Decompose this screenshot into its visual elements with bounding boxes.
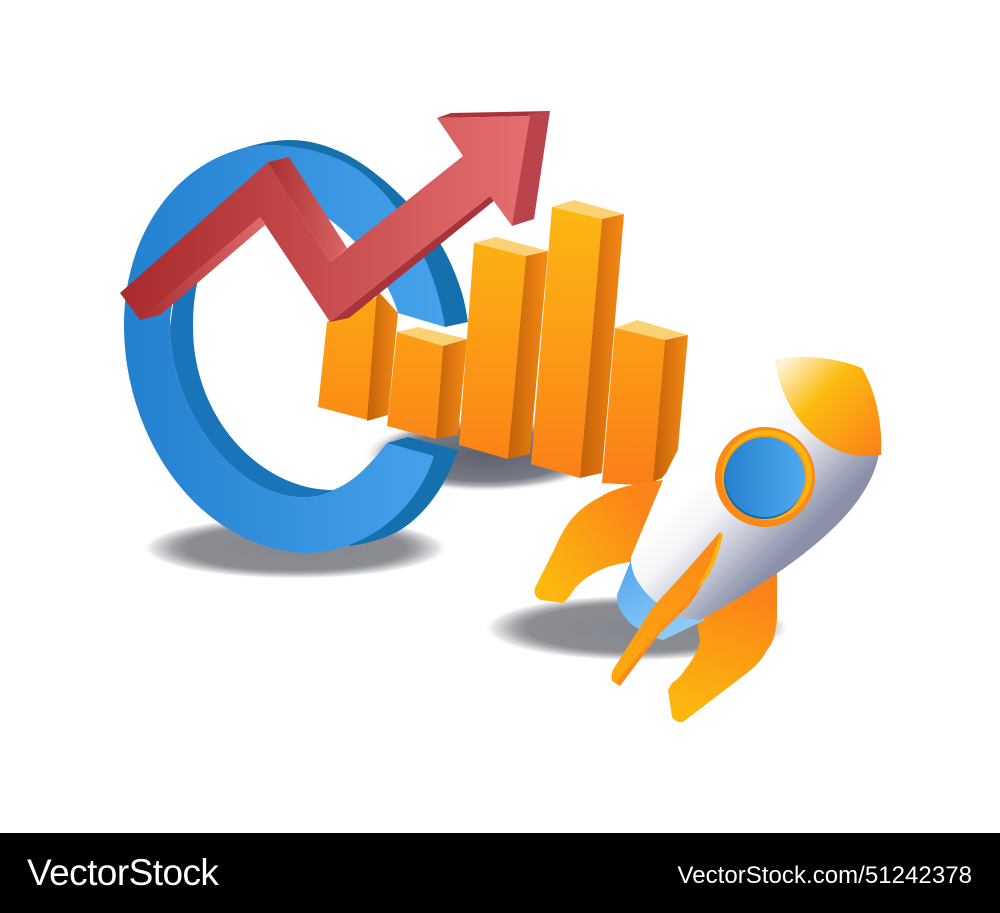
shadow: ring [142, 517, 448, 579]
brand name: VectorStock [27, 852, 218, 893]
red arrow [120, 111, 550, 322]
arrow fold side [268, 157, 347, 262]
image url: VectorStock.com/51242378 [678, 862, 972, 889]
exhaust base [617, 560, 705, 640]
arrow front face [120, 116, 530, 322]
porthole ring [715, 427, 815, 527]
porthole [715, 427, 815, 527]
footer bar [0, 833, 1000, 913]
ring top back side [237, 140, 468, 327]
bar 4 [531, 200, 624, 478]
bar 1 [318, 290, 398, 421]
rocket body [631, 360, 879, 620]
shadow: bars [363, 418, 607, 492]
porthole rim [724, 439, 804, 519]
arrow lower side left [140, 217, 265, 320]
arrow head top side [437, 111, 550, 118]
bar 2 [387, 327, 467, 439]
front fin silhouette [612, 532, 723, 686]
shadow: rocket [484, 595, 790, 661]
back fin left [534, 480, 663, 603]
arrow lower side right [330, 196, 495, 322]
front fin yellow rim [696, 532, 723, 590]
nose cone [775, 357, 881, 456]
porthole glass [725, 437, 805, 517]
rocket [534, 357, 881, 722]
front fin face [612, 532, 720, 682]
ring front face [124, 145, 445, 553]
bar chart [318, 200, 688, 486]
ring bottom back side [340, 437, 458, 546]
arrow head right side [512, 111, 550, 226]
blue ring [124, 140, 468, 553]
bar 3 [459, 237, 548, 459]
porthole inner ring [722, 430, 812, 520]
front fin [612, 532, 723, 686]
back fin right [668, 570, 777, 722]
bar 5 [602, 320, 688, 486]
ring inner band [170, 270, 333, 497]
